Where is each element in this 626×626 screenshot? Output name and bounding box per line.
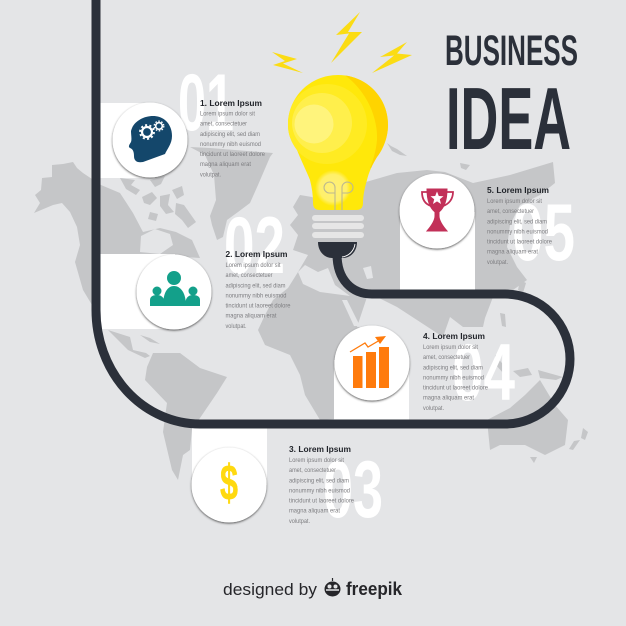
- step 5 text: tincidunt ut laoreet dolore: [487, 238, 552, 246]
- step 1 text: magna aliquam erat: [200, 161, 251, 168]
- step 2 text: adipiscing elit, sed diam: [226, 282, 286, 289]
- step 2 circle with people icon: [136, 254, 212, 330]
- step 3 text: magna aliquam erat: [289, 508, 340, 515]
- step 4 text: Lorem ipsum dolor sit: [423, 344, 478, 351]
- plug: [318, 242, 357, 258]
- step 3 text: 3. Lorem Ipsum: [289, 444, 351, 454]
- footer credit: designed by: [223, 580, 318, 599]
- step 2 text: magna aliquam erat: [226, 313, 277, 320]
- bulb glass: [285, 72, 392, 212]
- step numbers: 03: [323, 445, 383, 535]
- step 1 circle with head icon: [112, 102, 188, 178]
- title: [445, 27, 578, 168]
- step numbers: 04: [452, 328, 515, 418]
- footer credit: freepik: [346, 579, 403, 599]
- step 5 text: amet, consectetuer: [487, 208, 535, 215]
- step 4 text: nonummy nibh euismod: [423, 374, 484, 382]
- wire: [96, 0, 570, 424]
- step 5 text: adipiscing elit, sed diam: [487, 218, 547, 225]
- bulb screw base: [312, 215, 364, 238]
- step 1 text: Lorem ipsum dolor sit: [200, 110, 255, 118]
- step 1 text: amet, consectetuer: [200, 121, 248, 128]
- white strips: [100, 103, 475, 485]
- world map: [34, 143, 588, 480]
- step 4 text: magna aliquam erat: [423, 395, 474, 402]
- step 5 text: nonummy nibh euismod: [487, 228, 548, 236]
- step 1 text: volutpat.: [200, 171, 221, 178]
- step 3 text: adipiscing elit, sed diam: [289, 477, 349, 484]
- step 3 text: nonummy nibh euismod: [289, 488, 350, 494]
- step 3 text: tincidunt ut laoreet dolore: [289, 498, 354, 504]
- step 3 circle with dollar icon: $: [220, 455, 238, 511]
- step 3 text: [289, 444, 354, 525]
- step 5 text: magna aliquam erat: [487, 249, 538, 256]
- step 1 text: [200, 98, 265, 178]
- step 1 text: nonummy nibh euismod: [200, 141, 261, 148]
- step 4 text: volutpat.: [423, 405, 444, 412]
- step 4 text: [423, 331, 488, 412]
- step 5 text: 5. Lorem Ipsum: [487, 185, 549, 195]
- step 4 text: amet, consectetuer: [423, 354, 471, 361]
- step 3 text: Lorem ipsum dolor sit: [289, 457, 344, 464]
- light bulb: [272, 12, 412, 258]
- step numbers: 02: [224, 201, 285, 291]
- step 2 text: 2. Lorem Ipsum: [226, 249, 288, 259]
- step 2 text: [226, 249, 291, 330]
- step numbers: 01: [178, 58, 234, 148]
- step 3 text: amet, consectetuer: [289, 467, 337, 474]
- step 5 text: volutpat.: [487, 259, 508, 266]
- footer credit: [223, 578, 403, 599]
- step 2 text: nonummy nibh euismod: [226, 292, 287, 300]
- step 1 text: tincidunt ut laoreet dolore: [200, 151, 265, 158]
- lightning bolts: [272, 12, 412, 73]
- step 2 text: Lorem ipsum dolor sit: [226, 262, 281, 269]
- step 5 text: [487, 185, 552, 266]
- step 1 text: 1. Lorem Ipsum: [200, 98, 262, 108]
- step 4 text: tincidunt ut laoreet dolore: [423, 384, 488, 392]
- filament: [324, 182, 353, 210]
- step 4 text: 4. Lorem Ipsum: [423, 331, 485, 341]
- icon: freepik bee logo: [324, 578, 340, 596]
- step 2 text: amet, consectetuer: [226, 272, 273, 279]
- step 1 text: adipiscing elit, sed diam: [200, 131, 260, 138]
- step numbers: [178, 58, 575, 535]
- step 5 circle with trophy icon: [400, 174, 474, 248]
- step 3 text: volutpat.: [289, 518, 310, 525]
- step 2 text: tincidunt ut laoreet dolore: [226, 302, 291, 310]
- step 4 circle with chart icon: [334, 326, 410, 400]
- step 5 text: Lorem ipsum dolor sit: [487, 198, 542, 205]
- step 4 text: adipiscing elit, sed diam: [423, 364, 483, 371]
- step 2 text: volutpat.: [226, 323, 247, 330]
- step 3 circle with dollar icon: [192, 448, 266, 522]
- step numbers: 05: [512, 188, 575, 278]
